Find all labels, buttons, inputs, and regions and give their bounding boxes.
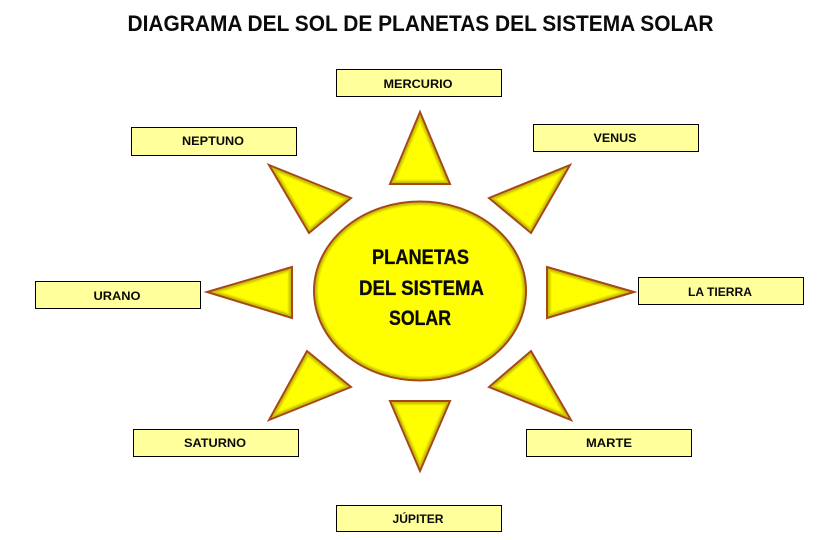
sun ray: La Tierra [547, 267, 634, 318]
centre text: PLANETAS [372, 245, 469, 269]
label: La Tierra [638, 278, 804, 304]
label: Urano [36, 282, 200, 308]
label: Urano: URANO [94, 289, 140, 303]
label: Neptuno [132, 128, 296, 156]
label: Venus: VENUS [594, 131, 636, 145]
label: Mercurio [336, 70, 502, 96]
label: Saturno: SATURNO [184, 436, 246, 450]
label: Saturno [134, 430, 298, 456]
sun ray: Venus [489, 165, 570, 233]
label: Júpiter [336, 506, 502, 532]
sun ray: Júpiter [390, 401, 450, 471]
label: Marte [526, 430, 692, 456]
sun ray: Marte [489, 351, 571, 420]
label: Mercurio: MERCURIO [384, 77, 452, 91]
sun ray: Neptuno [269, 165, 351, 233]
centre text: DEL SISTEMA [359, 276, 484, 300]
centre text: SOLAR [389, 306, 451, 330]
sun ray: Saturno [269, 351, 351, 420]
sun ray: Urano [207, 267, 292, 318]
sun centre [314, 202, 526, 380]
label: La Tierra: LA TIERRA [688, 285, 752, 299]
centre text [359, 245, 484, 330]
title: DIAGRAMA DEL SOL DE PLANETAS DEL SISTEMA SOLAR [128, 11, 714, 36]
sun ray: Mercurio [390, 112, 450, 184]
label: Venus [534, 124, 698, 152]
label: Júpiter: JÚPITER [392, 511, 444, 526]
label: Neptuno: NEPTUNO [182, 134, 244, 148]
label: Marte: MARTE [586, 436, 632, 450]
